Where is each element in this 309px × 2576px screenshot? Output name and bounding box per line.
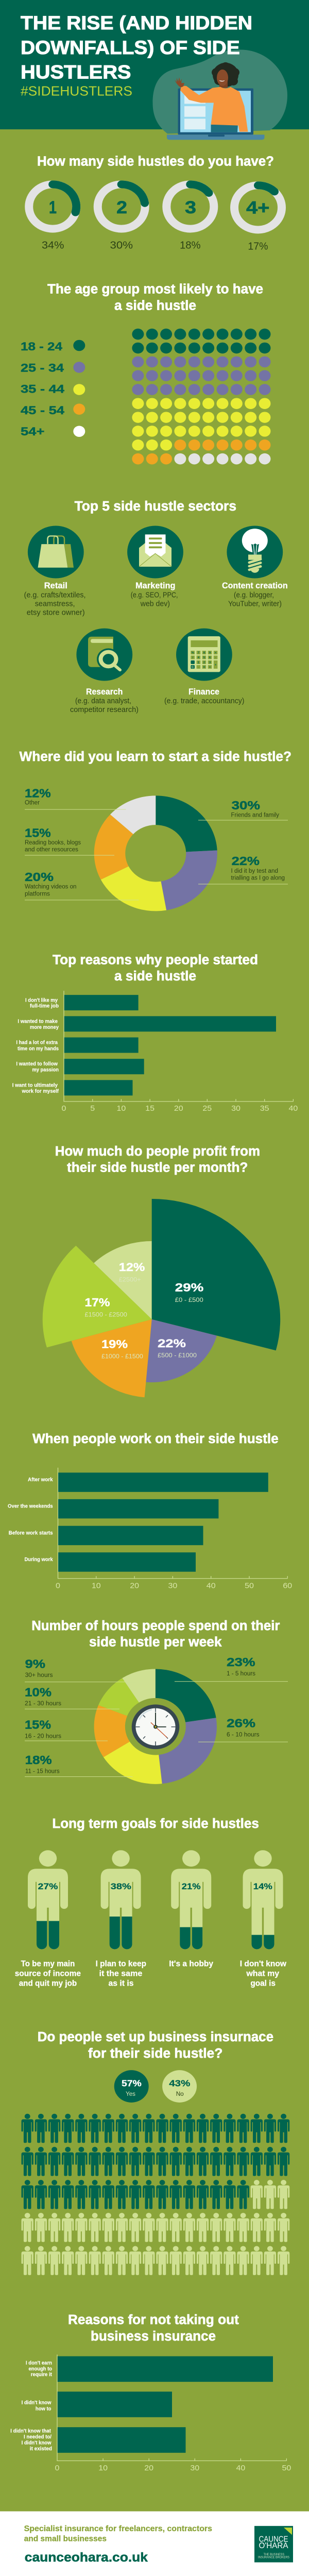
legend: 25 - 34 — [21, 361, 64, 374]
icon: calculator: 8 — [203, 652, 205, 655]
bar chart: I wanted to follow — [16, 1061, 58, 1067]
panel: age group — [21, 281, 271, 464]
callout: 22% test and trial: 22% — [232, 855, 260, 868]
ring: 3 side hustles 18%: 3 — [185, 197, 196, 217]
callout: 15% reading — [25, 827, 114, 856]
panel: monthly profit — [43, 1143, 280, 1397]
ring: 4+ side hustles 17%: 17% — [248, 240, 268, 252]
icon: light bulb — [242, 529, 268, 573]
icon: calculator — [188, 636, 220, 672]
panel: top reasons — [12, 952, 298, 1113]
logo: Caunce O'Hara: O'HARA — [259, 2541, 288, 2550]
sector: content creation: Content creation — [222, 581, 288, 590]
sector: marketing: (e.g. SEO, PPC, — [131, 591, 178, 599]
ring: 3 side hustles 18% — [166, 184, 214, 251]
callout: 20% videos — [25, 871, 139, 900]
hashtag: #SIDEHUSTLERS — [21, 83, 132, 98]
callout: 30% friends and family: 30% — [232, 799, 260, 812]
heading: How much do people profit from — [55, 1143, 260, 1159]
callout: 23% 1-5 hours — [175, 1656, 288, 1682]
heading: Where did you learn to start a side hustle? — [20, 749, 291, 764]
panel: hours per week — [25, 1618, 288, 1784]
title: HUSTLERS — [21, 62, 131, 83]
heading: The age group most likely to have — [47, 281, 263, 296]
bar chart: 30 — [231, 1104, 241, 1113]
goal: main source of income 27%: 27% — [38, 1881, 58, 1891]
callout: 9% 30+ hours — [25, 1658, 136, 1682]
callout: 30% friends and family — [198, 799, 288, 820]
heading — [53, 952, 258, 984]
bar chart: Over the weekends — [8, 1503, 53, 1510]
heading: a side hustle — [114, 968, 196, 984]
icon: calculator: = — [209, 666, 211, 669]
sector: content creation: YouTuber, writer) — [228, 600, 282, 608]
bar chart: I don't like my — [25, 997, 58, 1003]
goal: keep it the same 38% — [96, 1850, 146, 1988]
bar chart: require it — [31, 2371, 52, 2378]
title: DOWNFALLS) OF SIDE — [21, 37, 240, 59]
heading: Do people set up business insurnace — [38, 2029, 273, 2044]
icon: calculator: 1 — [198, 662, 200, 664]
bar chart: 5 — [90, 1104, 95, 1113]
icon: calculator: - — [215, 656, 216, 659]
bar chart: During work — [25, 1556, 53, 1563]
badge: yes 57%: 57% — [122, 2078, 142, 2089]
goal: don't know 14%: what my — [246, 1969, 280, 1978]
bar chart: 40 — [236, 2464, 246, 2472]
sector: retail: Retail — [44, 581, 67, 590]
donut chart — [94, 795, 217, 911]
goal: hobby 21% — [169, 1850, 214, 1968]
callout: 15% 16-20 hours: 16 - 20 hours — [25, 1733, 61, 1739]
bar chart: more money — [30, 1024, 59, 1030]
heading — [38, 2029, 273, 2061]
bar chart: I needed to/ — [24, 2434, 52, 2440]
callout: 12% other: 12% — [25, 787, 51, 800]
bar chart — [10, 2354, 291, 2472]
goal: don't know 14%: I don't know — [240, 1959, 286, 1968]
callout: 26% 6-10 hours: 6 - 10 hours — [227, 1731, 260, 1738]
bar chart: 50 — [282, 2464, 291, 2472]
icon: envelope and letter — [139, 534, 171, 567]
heading — [47, 281, 263, 313]
icon: calculator: / — [192, 656, 193, 659]
heading: Reasons for not taking out — [68, 2312, 239, 2327]
badge: no 43%: No — [176, 2090, 184, 2097]
bar chart: 30 — [168, 1582, 178, 1590]
rose chart — [43, 1199, 280, 1397]
sector: research: competitor research) — [70, 705, 139, 714]
bar chart: I had a lot of extra — [16, 1040, 58, 1046]
illustration: woman waving from laptop — [152, 49, 287, 140]
goal: hobby 21%: 21% — [182, 1881, 201, 1891]
icon: shopping bags — [38, 536, 74, 568]
callout: 18% 11-15 hours: 11 - 15 hours — [25, 1768, 60, 1774]
bar chart: 20 — [174, 1104, 183, 1113]
bar chart: 0 — [62, 1104, 66, 1113]
goal: hobby 21%: It's a hobby — [169, 1959, 214, 1968]
callout: 20% videos: 20% — [25, 871, 54, 884]
callout: 15% reading: Reading books, blogs — [25, 839, 81, 846]
bar chart: it existed — [30, 2446, 52, 2452]
heading — [31, 1618, 280, 1649]
panel: header — [0, 0, 309, 140]
callout: 22% test and trial — [198, 855, 288, 885]
sector: retail: (e.g. crafts/textiles, — [24, 591, 85, 599]
icon: calculator: 4 — [198, 656, 200, 659]
website url: caunceohara.co.uk — [25, 2550, 148, 2565]
heading — [68, 2312, 239, 2344]
title: THE RISE (AND HIDDEN — [21, 12, 252, 34]
heading: Top reasons why people started — [53, 952, 258, 967]
badge: yes 57%: Yes — [126, 2090, 135, 2097]
rose chart: £500 - £1000 — [158, 1352, 197, 1359]
rose chart: £0 - £500 — [175, 1296, 203, 1303]
bar chart — [8, 1468, 293, 1590]
goal: don't know 14%: goal is — [250, 1979, 276, 1988]
bar chart: full-time job — [30, 1003, 59, 1009]
callout: 18% 11-15 hours: 18% — [25, 1754, 52, 1767]
rose chart: £2500+ — [119, 1276, 141, 1283]
heading: their side hustle per month? — [67, 1159, 248, 1175]
bar chart: 10 — [92, 1582, 101, 1590]
heading: for their side hustle? — [88, 2045, 222, 2061]
legend: 54+ — [21, 425, 44, 438]
title — [21, 12, 252, 83]
bar chart: After work — [28, 1477, 53, 1483]
bar chart: 20 — [130, 1582, 139, 1590]
heading: Top 5 side hustle sectors — [75, 498, 236, 514]
heading: When people work on their side hustle — [32, 1431, 279, 1446]
logo: Caunce O'Hara: THE BUSINESS — [264, 2553, 284, 2556]
legend: 45 - 54 — [21, 404, 64, 417]
rose chart: £1000 - £1500 — [101, 1353, 143, 1360]
panel: reasons for no insurance — [10, 2312, 291, 2472]
heading: business insurance — [91, 2328, 216, 2344]
bar chart: 20 — [144, 2464, 153, 2472]
ring: 4+ side hustles 17%: 4+ — [246, 198, 270, 217]
bar chart: my passion — [32, 1067, 59, 1073]
sector: marketing: Marketing — [135, 581, 176, 590]
bar chart: 25 — [202, 1104, 212, 1113]
goal: main source of income 27%: and quit my job — [19, 1979, 77, 1988]
icon: calculator: 6 — [209, 656, 211, 659]
sector: finance: Finance — [188, 686, 219, 697]
sector: marketing: web dev) — [140, 600, 170, 608]
callout: 15% reading: 15% — [25, 827, 51, 840]
legend — [21, 340, 85, 438]
icon: calculator: 9 — [209, 652, 211, 655]
icon: calculator: × — [215, 652, 217, 655]
callout: 30% friends and family: Friends and family — [231, 811, 280, 818]
callout: 15% reading: and other resources — [25, 846, 78, 853]
logo: Caunce O'Hara: INSURANCE BROKERS — [258, 2556, 289, 2560]
footer tagline — [24, 2524, 212, 2543]
bar chart: 60 — [283, 1582, 293, 1590]
bar chart: I didn't know that — [10, 2428, 51, 2434]
panel: footer — [0, 2511, 309, 2576]
rose chart: £1500 - £2500 — [84, 1311, 127, 1318]
ring: 2 side hustles 30%: 2 — [116, 197, 127, 217]
callout: 26% 6-10 hours: 26% — [227, 1717, 255, 1731]
callout: 22% test and trial: I did it by test and — [231, 867, 278, 874]
bar chart: I don't earn — [26, 2360, 52, 2366]
sector: content creation: (e.g. blogger, — [234, 591, 274, 599]
panel: when people work — [8, 1431, 293, 1590]
bar chart: Before work starts — [9, 1530, 53, 1536]
goal: keep it the same 38%: I plan to keep — [96, 1959, 146, 1968]
callout: 23% 1-5 hours: 1 - 5 hours — [227, 1670, 255, 1677]
panel: top 5 sectors — [24, 498, 288, 714]
sector: research: (e.g. data analyst, — [75, 697, 131, 705]
legend: 35 - 44 — [21, 382, 64, 395]
callout: 15% 16-20 hours — [25, 1719, 108, 1741]
heading: a side hustle — [114, 297, 196, 313]
bar chart: 40 — [288, 1104, 298, 1113]
icon: calculator: % — [192, 652, 194, 655]
callout: 10% 21-30 hours: 10% — [25, 1686, 52, 1699]
heading: How many side hustles do you have? — [37, 153, 274, 168]
rose chart: 29% — [175, 1281, 204, 1294]
sector: retail: etsy store owner) — [27, 608, 85, 617]
badge: no 43% — [162, 2070, 197, 2103]
bar chart: how to — [36, 2406, 52, 2412]
dot matrix chart — [132, 329, 271, 464]
ring: 3 side hustles 18%: 18% — [180, 239, 201, 251]
icon: calculator: 2 — [203, 662, 205, 664]
sector: research: Research — [86, 686, 123, 697]
bar chart: 30 — [190, 2464, 200, 2472]
donut chart — [94, 1669, 217, 1784]
goal: don't know 14%: 14% — [253, 1881, 272, 1891]
bar chart: I wanted to make — [18, 1019, 58, 1024]
bar chart: 10 — [116, 1104, 126, 1113]
bar chart: 35 — [260, 1104, 269, 1113]
sector: retail: seamstress, — [35, 600, 75, 608]
callout: 12% other — [25, 787, 126, 810]
bar chart: work for myself — [22, 1088, 59, 1094]
rose chart: 22% — [158, 1336, 186, 1350]
callout: 26% 6-10 hours — [198, 1717, 288, 1742]
callout: 9% 30+ hours: 30+ hours — [25, 1671, 53, 1679]
heading — [55, 1143, 260, 1175]
ring: 1 side hustle 34%: 34% — [42, 239, 64, 251]
badge: yes 57% — [114, 2070, 149, 2103]
icon: calculator: 0 — [203, 666, 205, 669]
sector: marketing — [127, 526, 183, 608]
bar chart: I didn't know — [22, 2440, 52, 2446]
icon: calculator: C — [192, 666, 194, 669]
icon: clock — [132, 1704, 179, 1749]
footer tagline: and small businesses — [24, 2534, 107, 2543]
callout: 22% test and trial: trialling as I go along — [231, 874, 285, 882]
goal: keep it the same 38%: 38% — [111, 1881, 131, 1891]
goal: don't know 14% — [240, 1850, 286, 1988]
panel: how many side hustles — [29, 153, 282, 252]
bar chart: I didn't know — [22, 2400, 52, 2405]
goal: keep it the same 38%: it the same — [99, 1969, 142, 1978]
logo: Caunce O'Hara — [254, 2526, 293, 2562]
bar chart: time on my hands — [18, 1046, 59, 1052]
icon: calculator: 7 — [198, 652, 199, 655]
heading: side hustle per week — [89, 1634, 222, 1649]
sector: finance: (e.g. trade, accountancy) — [164, 697, 244, 705]
bar chart: 0 — [55, 2464, 60, 2472]
callout: 10% 21-30 hours — [25, 1686, 119, 1709]
ring: 2 side hustles 30%: 30% — [110, 239, 133, 251]
callout: 18% 11-15 hours — [25, 1754, 133, 1777]
bar chart: I want to ultimately — [12, 1082, 58, 1088]
bar chart — [12, 991, 298, 1113]
goal: keep it the same 38%: as it is — [108, 1979, 133, 1988]
rose chart: 12% — [119, 1261, 145, 1274]
sector: retail — [24, 526, 85, 617]
sector: content creation — [222, 526, 288, 608]
icon: calculator: 5 — [203, 656, 205, 659]
ring: 1 side hustle 34% — [29, 184, 76, 251]
goal: main source of income 27%: source of income — [15, 1969, 81, 1978]
goal: main source of income 27% — [15, 1850, 81, 1988]
legend: 18 - 24 — [21, 340, 62, 353]
footer tagline: Specialist insurance for freelancers, contractors — [24, 2524, 212, 2533]
panel: where did you learn — [20, 749, 291, 911]
badge: no 43%: 43% — [169, 2078, 190, 2089]
ring: 4+ side hustles 17% — [234, 185, 282, 252]
sector: research — [70, 629, 139, 714]
goal: main source of income 27%: To be my main — [21, 1959, 75, 1968]
ring: 2 side hustles 30% — [98, 184, 145, 251]
bar chart: 40 — [207, 1582, 216, 1590]
bar chart: 15 — [145, 1104, 154, 1113]
callout: 9% 30+ hours: 9% — [25, 1658, 45, 1671]
panel: business insurance — [22, 2029, 289, 2275]
icon: calculator: . — [198, 666, 199, 669]
icon: book and magnifying glass — [88, 637, 120, 670]
rose chart: 17% — [84, 1296, 110, 1309]
ring: 1 side hustle 34%: 1 — [49, 197, 57, 217]
bar chart: enough to — [28, 2366, 52, 2372]
bar chart: 0 — [56, 1582, 60, 1590]
heading: Number of hours people spend on their — [31, 1618, 280, 1633]
rose chart: 19% — [101, 1337, 128, 1350]
callout: 20% videos: platforms — [25, 890, 50, 897]
callout: 10% 21-30 hours: 21 - 30 hours — [25, 1700, 61, 1707]
bar chart: 10 — [98, 2464, 108, 2472]
logo: Caunce O'Hara: CAUNCE — [259, 2535, 288, 2544]
heading: Long term goals for side hustles — [52, 1816, 259, 1831]
sector: finance — [164, 629, 244, 705]
pictogram: 100 people, 57 insured — [22, 2114, 289, 2275]
bar chart: 50 — [245, 1582, 254, 1590]
panel: long term goals — [15, 1816, 286, 1988]
callout: 20% videos: Watching videos on — [25, 883, 76, 890]
icon: calculator: + — [215, 664, 217, 667]
icon: calculator: 3 — [209, 662, 211, 664]
callout: 23% 1-5 hours: 23% — [227, 1656, 255, 1669]
callout: 12% other: Other — [25, 799, 40, 806]
callout: 15% 16-20 hours: 15% — [25, 1719, 51, 1732]
